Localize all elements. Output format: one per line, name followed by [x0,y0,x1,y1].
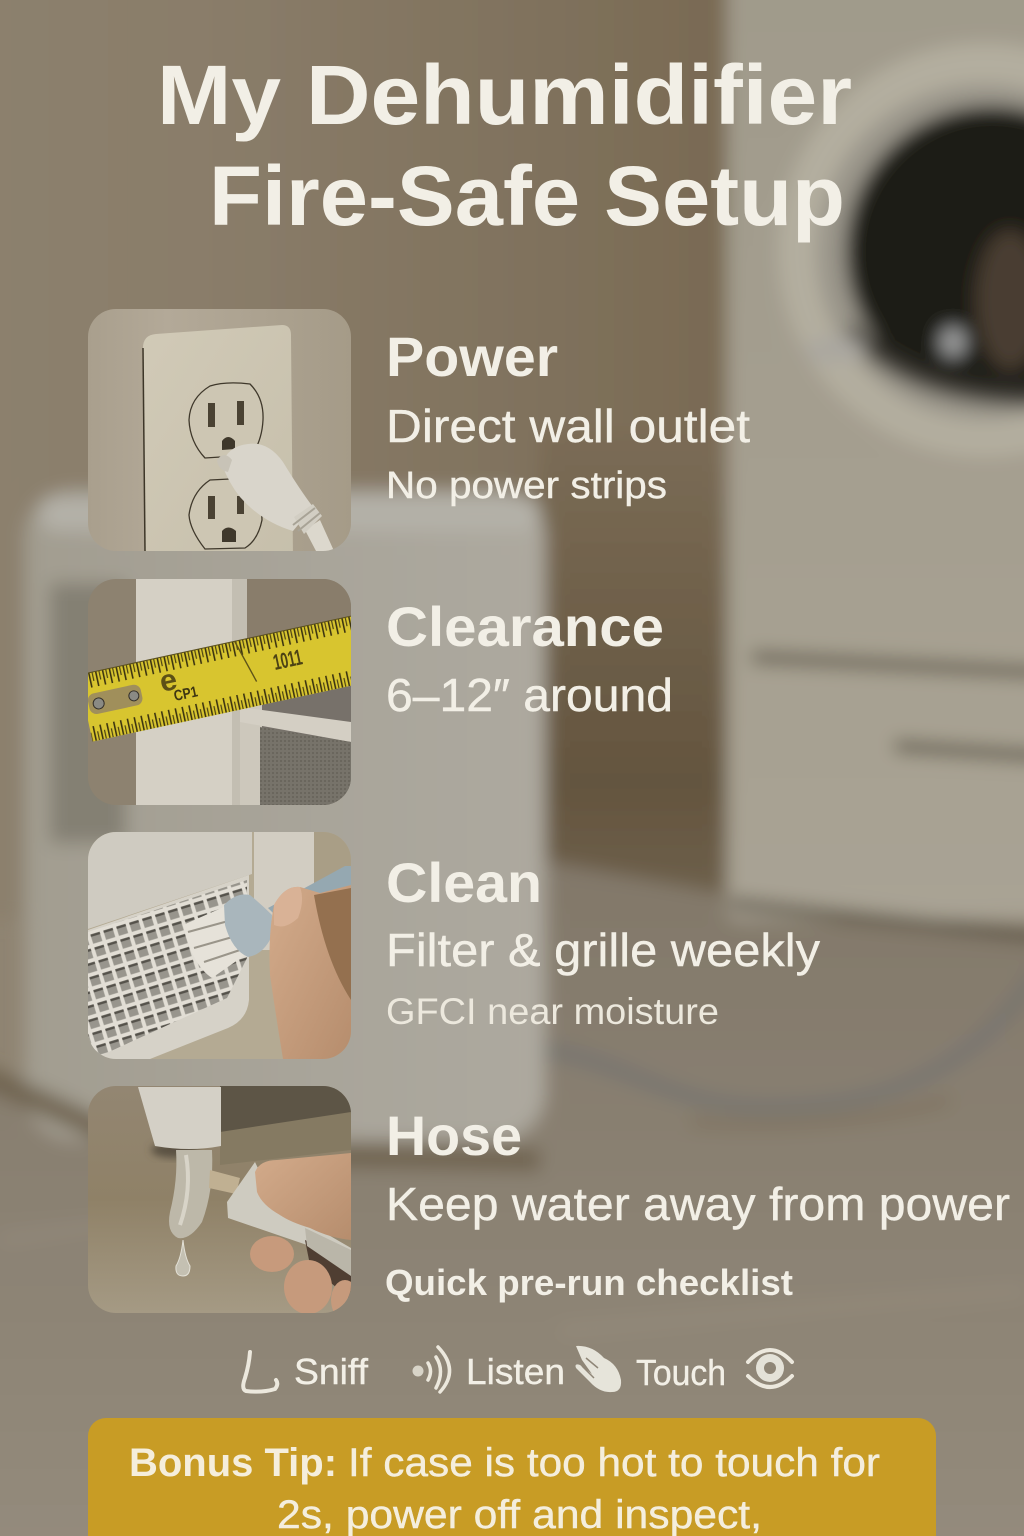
step: clearance: 6–12″ around [386,669,673,721]
photo: drain hose and water drop [88,1086,359,1320]
step: clean: Filter & grille weekly [386,924,820,976]
power plug and cord [217,444,334,551]
title: Fire-Safe Setup [209,149,845,243]
unit drain spout [138,1087,221,1158]
unit top housing [88,832,252,929]
label: sniff: Sniff [294,1351,369,1392]
title: My Dehumidifier [157,48,852,142]
bonus tip callout: 2s, power off and inspect, [277,1493,762,1536]
step: clean: Clean [386,851,542,914]
bonus tip callout [88,1418,936,1536]
hand holding plug [209,1153,359,1320]
tape markings: CP1 [172,683,199,705]
step: power: Direct wall outlet [386,400,750,452]
title [157,48,852,243]
step: clean: GFCI near moisture [386,991,719,1032]
tape markings: e [157,663,180,699]
step: clearance [386,595,673,721]
hand holding brush [183,866,351,1059]
photo: tape measure on unit [88,579,351,805]
icon: sound waves [412,1347,450,1392]
clear hose and drip [169,1150,212,1276]
photo: brush cleaning grille [88,832,351,1059]
step: hose: Keep water away from power [386,1178,1010,1230]
icon: eye [748,1350,792,1387]
unit frame and mesh filter [240,700,351,805]
tape markings: 1011 [271,644,304,675]
label: listen: Listen [466,1351,565,1392]
photo: plug in wall outlet [88,309,351,560]
step: power: Power [386,325,558,388]
step: hose [386,1104,1010,1230]
icon: nose [243,1352,277,1392]
bonus tip callout: Bonus Tip: [129,1441,337,1485]
bonus tip callout: If case is too hot to touch for [348,1441,880,1485]
yellow tape measure [88,616,351,742]
checklist heading: Quick pre-run checklist [385,1262,793,1303]
icon: touching hand [576,1346,621,1392]
tape markings [161,650,303,700]
step: clearance: Clearance [386,595,664,658]
outlet wall plate [143,325,293,560]
step: power [386,325,750,507]
label: touch: Touch [636,1352,726,1393]
filter grille [88,875,249,1059]
step: clean [386,851,820,1032]
step: hose: Hose [386,1104,522,1167]
step: power: No power strips [386,465,667,507]
